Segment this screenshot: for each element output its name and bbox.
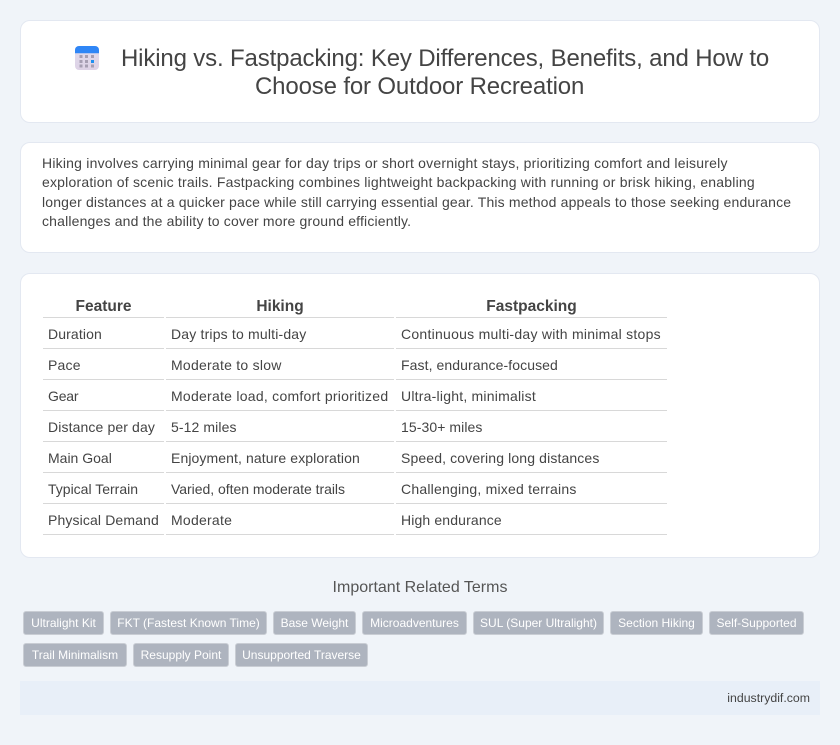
related term tags: Trail Minimalism [32, 648, 118, 662]
comparison table: Gear [48, 388, 78, 404]
related term tags: SUL (Super Ultralight) [480, 616, 597, 630]
comparison table: Pace [48, 357, 81, 373]
related term tags: FKT (Fastest Known Time) [117, 616, 260, 630]
related term tags: Self-Supported [716, 616, 797, 630]
comparison table: Ultra-light, minimalist [401, 388, 536, 404]
title [121, 45, 769, 100]
title: Hiking vs. Fastpacking: Key Differences, Benefits, and How to [121, 45, 769, 72]
comparison table: Challenging, mixed terrains [401, 481, 577, 497]
comparison table: Distance per day [48, 419, 155, 435]
comparison table: Fast, endurance-focused [401, 357, 558, 373]
intro paragraph: Hiking involves carrying minimal gear for day trips or short overnight stays, prioritizing comfort and leisurely [42, 155, 728, 171]
comparison table: Moderate to slow [171, 357, 282, 373]
intro paragraph [42, 155, 791, 229]
comparison table: Speed, covering long distances [401, 450, 599, 466]
title: Choose for Outdoor Recreation [255, 73, 584, 100]
intro paragraph: challenges and the ability to cover more ground efficiently. [42, 213, 411, 229]
related term tags [23, 611, 804, 667]
related term tags: Section Hiking [618, 616, 695, 630]
icon: calendar [75, 46, 99, 70]
comparison table [43, 298, 667, 535]
related term tags: Base Weight [281, 616, 348, 630]
intro paragraph: longer distances at a quicker pace while still carrying essential gear. This method appeals to those seeking endurance [42, 194, 791, 210]
comparison table: Continuous multi-day with minimal stops [401, 326, 661, 342]
comparison table: Duration [48, 326, 102, 342]
table header: Hiking [256, 298, 304, 315]
comparison table: Day trips to multi-day [171, 326, 306, 342]
comparison table: Main Goal [48, 450, 112, 466]
comparison table: 5-12 miles [171, 419, 237, 435]
comparison table: Moderate load, comfort prioritized [171, 388, 388, 404]
comparison table: Moderate [171, 512, 232, 528]
table header: Feature [76, 298, 132, 315]
related term tags: Microadventures [370, 616, 459, 630]
footer source text: industrydif.com [727, 691, 810, 705]
table header [76, 298, 577, 315]
footer bar [20, 681, 820, 715]
related term tags: Ultralight Kit [31, 616, 96, 630]
comparison table: Physical Demand [48, 512, 159, 528]
comparison table: Enjoyment, nature exploration [171, 450, 360, 466]
panel: table card [20, 273, 820, 558]
comparison table: High endurance [401, 512, 502, 528]
heading: related terms: Important Related Terms [333, 579, 507, 596]
related term tags: Unsupported Traverse [242, 648, 361, 662]
related term tags: Resupply Point [141, 648, 221, 662]
comparison table: Varied, often moderate trails [171, 481, 345, 497]
comparison table: 15-30+ miles [401, 419, 483, 435]
comparison table: Typical Terrain [48, 481, 138, 497]
panel: intro card [20, 142, 820, 253]
panel: title card [20, 20, 820, 123]
table header: Fastpacking [486, 298, 577, 315]
intro paragraph: exploration of scenic trails. Fastpacking combines lightweight backpacking with running or brisk hiking, enabling [42, 174, 755, 190]
